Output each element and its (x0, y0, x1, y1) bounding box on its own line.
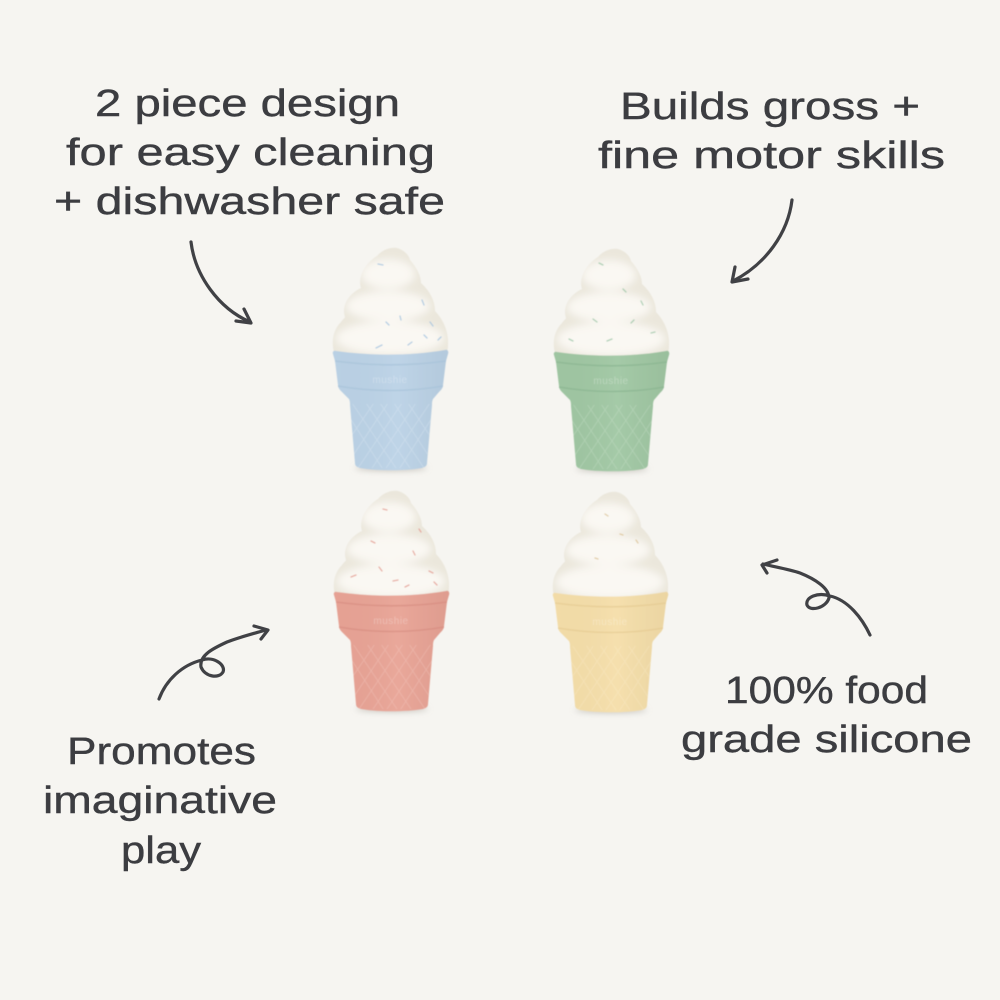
sprinkles (351, 509, 437, 587)
callout: food grade silicone: grade silicone (681, 719, 972, 761)
callout: gross and fine motor skills: fine motor skills (598, 135, 945, 177)
swirl top (333, 248, 448, 360)
callout: imaginative play: play (121, 830, 201, 872)
callout: imaginative play: Promotes (67, 731, 256, 773)
waffle pattern (351, 641, 435, 715)
contact shadow (576, 466, 648, 472)
sprinkles (569, 263, 655, 341)
sprinkles (595, 514, 638, 559)
ice cream: pink (334, 491, 449, 715)
rim lines (335, 361, 446, 390)
logo: mushie (373, 616, 409, 627)
callout: gross and fine motor skills: Builds gross + (620, 86, 920, 128)
arrow: bottom right loop (762, 560, 870, 635)
cone (554, 351, 669, 471)
waffle pattern (570, 642, 654, 716)
waffle pattern (571, 401, 655, 475)
callout: imaginative play: imaginative (43, 780, 277, 822)
callout: 2 piece design (54, 83, 445, 223)
logo: mushie (593, 376, 629, 387)
logo: mushie (592, 617, 628, 628)
cone (334, 591, 449, 711)
swirl top (554, 249, 669, 361)
contact shadow (355, 465, 427, 471)
cone (333, 350, 448, 470)
waffle pattern (350, 400, 434, 474)
logo: mushie (372, 375, 408, 386)
contact shadow (356, 706, 428, 712)
callout: 2 piece design: + dishwasher safe (54, 181, 445, 223)
callout: 2 piece design: 2 piece design (95, 83, 400, 125)
swirl top (553, 492, 668, 604)
callout: food grade silicone (681, 670, 972, 761)
rim lines (555, 603, 666, 632)
callout: food grade silicone: 100% food (725, 670, 928, 712)
rim lines (556, 362, 667, 392)
ice cream: yellow (553, 492, 668, 716)
arrow: bottom left loop (159, 626, 268, 699)
sprinkles (376, 264, 441, 348)
ice cream: green (554, 249, 669, 475)
ice cream: blue (333, 248, 448, 474)
arrow: top right (732, 200, 792, 282)
callout: gross and fine motor skills (598, 86, 945, 177)
callout: imaginative play (43, 731, 277, 872)
rim lines (336, 602, 447, 632)
cone (553, 592, 668, 712)
swirl top (334, 491, 449, 603)
contact shadow (575, 707, 647, 713)
arrow: top left (191, 242, 251, 323)
callout: 2 piece design: for easy cleaning (66, 132, 435, 174)
